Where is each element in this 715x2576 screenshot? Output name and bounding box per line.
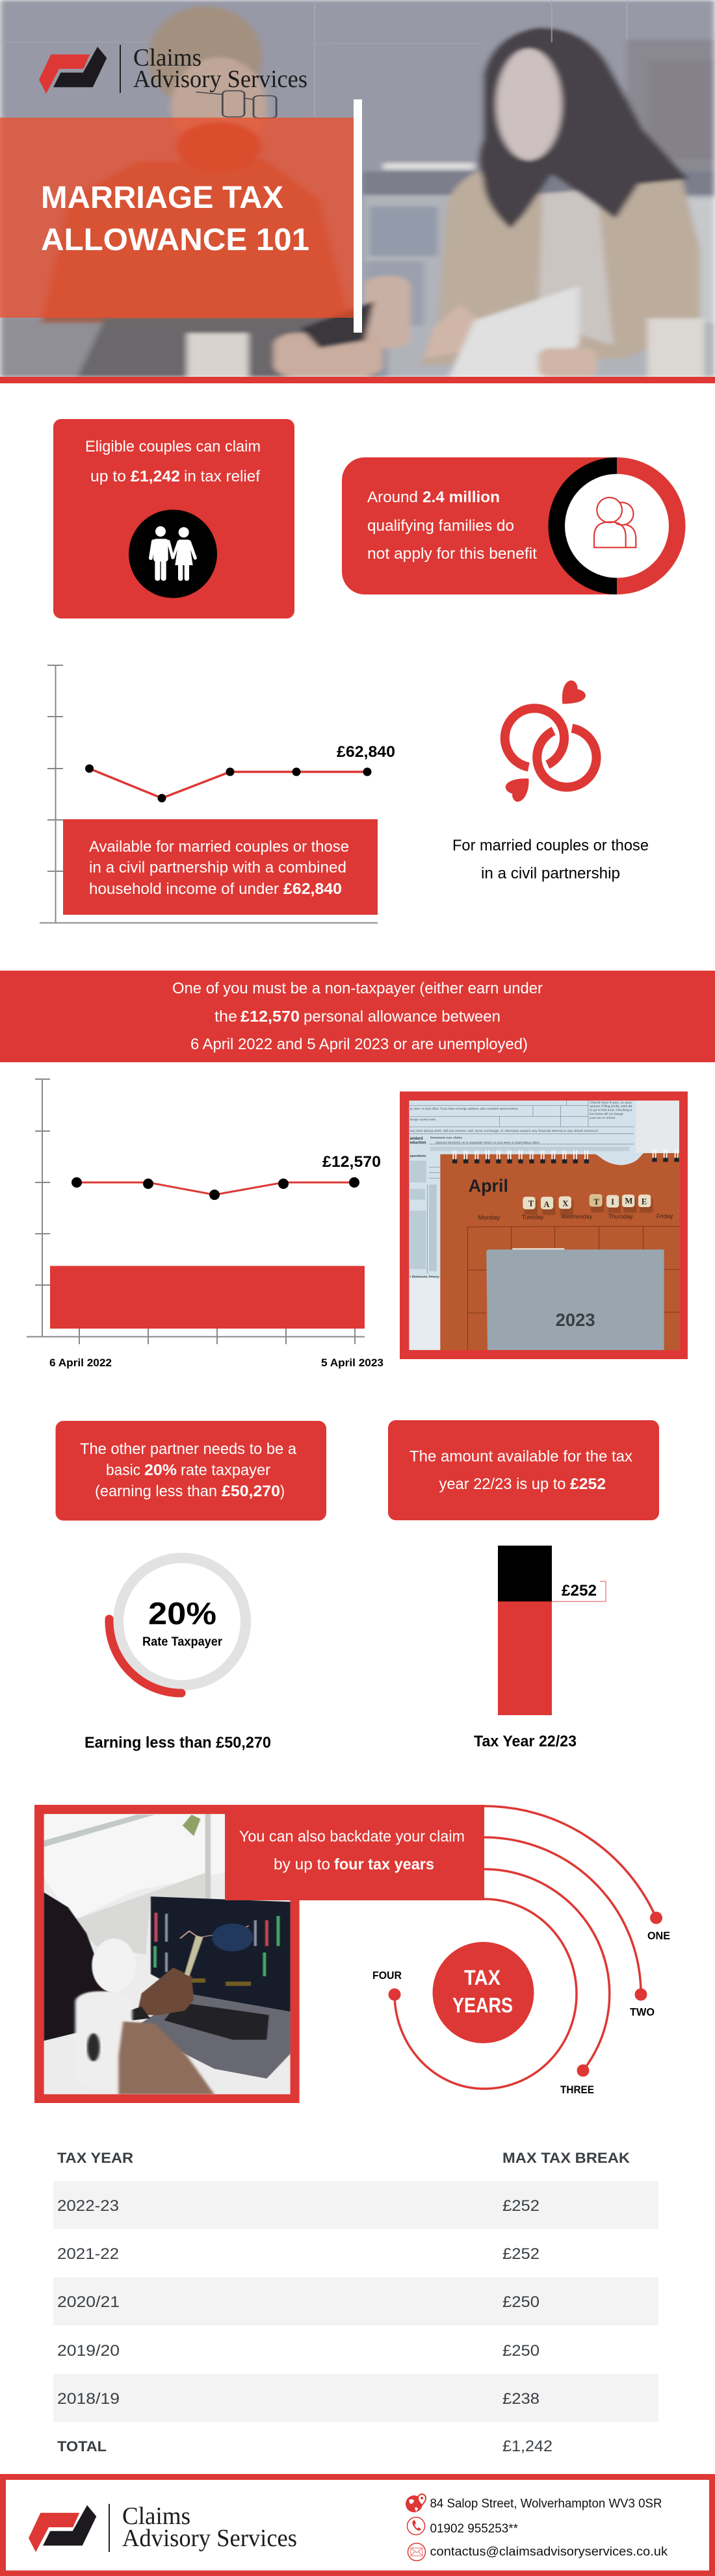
photo: person reviewing charts on laptop (34, 1805, 484, 2103)
photo: April tax time calendar: box below will not change (590, 1112, 624, 1116)
table rows: £252 (502, 2245, 540, 2263)
panel text: qualifying families do (367, 517, 514, 535)
photo: April tax time calendar: Friday (656, 1213, 673, 1219)
arc labels: THREE (560, 2084, 594, 2096)
photo: April tax time calendar: T (528, 1199, 534, 1208)
banner: non-taxpayer requirement: £12,570 (240, 1008, 300, 1025)
table rows: £1,242 (502, 2438, 552, 2455)
text: for married couples: For married couples or those (452, 837, 649, 854)
panel: other partner basic rate: 20% (144, 1462, 177, 1479)
panel text: £1,242 (131, 468, 180, 485)
icon: globe with pin (406, 2494, 426, 2512)
banner: non-taxpayer requirement: personal allowance between (304, 1008, 500, 1025)
table rows: 2020/21 (57, 2293, 120, 2311)
arc labels: ONE (647, 1930, 670, 1942)
panel text (367, 489, 537, 563)
label: tax year: Tax Year 22/23 (474, 1733, 577, 1750)
icon: couple holding hands (129, 509, 217, 598)
photo: April tax time calendar: X (562, 1199, 568, 1208)
photo: April tax time calendar: M (625, 1197, 632, 1206)
panel: amount available: The amount available for the tax (410, 1447, 632, 1466)
value label: £12,570 (322, 1153, 381, 1171)
arc labels: TWO (630, 2006, 655, 2018)
centre circle: tax years (433, 1942, 534, 2043)
photo: April tax time calendar: any time during 2020, did you receive, sell, send, exchange, or otherwise acquire any financial interest in any virtual currency? (410, 1129, 599, 1132)
photo: April tax time calendar: spouse if filing jointly, want $3 (590, 1104, 632, 1108)
white vertical bar (354, 99, 362, 333)
photo: April tax time calendar: r Disclosure, Privacy (410, 1275, 439, 1279)
photo: April tax time calendar: Monday (478, 1214, 500, 1221)
panel: other partner basic rate: basic (106, 1462, 140, 1479)
panel text: 2.4 million (422, 489, 500, 506)
panel: eligible couples claim (53, 419, 294, 618)
banner: non-taxpayer requirement: 6 April 2022 and 5 April 2023 or are unemployed) (190, 1036, 528, 1053)
contact: email: contactus@claimsadvisoryservices.co.uk (430, 2545, 668, 2558)
title (41, 181, 309, 257)
footer logo (29, 2503, 297, 2552)
logo: Claims Advisory Services: Advisory Services (133, 66, 307, 93)
chart: tax year stacked bar: £252 (562, 1582, 597, 1600)
logo: Claims Advisory Services (39, 44, 307, 94)
logo: Claims Advisory Services: Claims (133, 44, 202, 71)
photo: April tax time calendar: Spouse itemizes on a separate return or you were a dual-status alien (436, 1141, 540, 1144)
chart: combined income line chart (40, 665, 395, 923)
panel: amount available: £252 (570, 1475, 606, 1493)
panel text: not apply for this benefit (367, 545, 537, 563)
diagram: four tax years orbit arcs (372, 1806, 670, 2096)
table rows: 2018/19 (57, 2390, 120, 2408)
photo: April tax time calendar: Wednesday (561, 1214, 593, 1220)
panel: other partner basic rate: £50,270 (222, 1483, 280, 1500)
callout: combined household income (63, 819, 378, 915)
table rows: £250 (502, 2293, 540, 2311)
ring with people icon (549, 457, 685, 594)
chart: 20% rate taxpayer donut: 20% (148, 1597, 216, 1631)
footer logo: Advisory Services (122, 2525, 297, 2552)
callout: combined household income: £62,840 (283, 880, 342, 898)
photo: April tax time calendar: foreign country name (410, 1118, 436, 1121)
photo: April tax time calendar: Thursday (608, 1213, 633, 1219)
date labels: 5 April 2023 (321, 1357, 384, 1369)
red text box (225, 1805, 484, 1900)
table rows: £250 (502, 2342, 540, 2360)
banner: non-taxpayer requirement: the (214, 1008, 237, 1025)
translucent red title panel (0, 118, 354, 318)
panel text: in tax relief (184, 468, 260, 485)
panel text: up to (90, 468, 126, 485)
table header (57, 2150, 630, 2166)
panel: other partner basic rate: ) (280, 1483, 285, 1500)
chart: 20% rate taxpayer donut (109, 1558, 246, 1693)
date labels: 6 April 2022 (49, 1357, 112, 1369)
table header: MAX TAX BREAK (502, 2150, 630, 2166)
panel: 2.4 million families (342, 457, 685, 594)
chart: personal allowance line chart (27, 1079, 384, 1369)
panel: other partner basic rate: (earning less than (95, 1483, 217, 1500)
photo: April tax time calendar: your tax or refund. (590, 1116, 616, 1119)
table: maximum tax break by year (53, 2150, 658, 2455)
photo: April tax time calendar: A (543, 1200, 550, 1209)
title: ALLOWANCE 101 (41, 223, 309, 257)
centre circle: tax years: YEARS (452, 1993, 513, 2017)
table rows: 2022-23 (57, 2197, 119, 2215)
text: for married couples (452, 837, 649, 882)
photo: April tax time calendar: T (593, 1197, 599, 1206)
arc labels (372, 1930, 670, 2096)
label: earning less than: Earning less than £50,270 (84, 1734, 271, 1752)
contact: phone: 01902 955253** (430, 2522, 519, 2536)
photo: April tax time calendar: 2023 (556, 1310, 595, 1330)
table rows: TOTAL (57, 2438, 107, 2455)
chart: 20% rate taxpayer donut: Rate Taxpayer (142, 1635, 223, 1649)
title: MARRIAGE TAX (41, 181, 283, 215)
banner: non-taxpayer requirement (0, 971, 715, 1062)
hero bottom red band (0, 377, 715, 383)
photo: April tax time calendar: to go to this fund. Checking a (590, 1108, 632, 1112)
table rows: 2019/20 (57, 2342, 120, 2360)
callout: combined household income: household income of under (89, 880, 279, 898)
photo: April tax time calendar: eduction (410, 1141, 426, 1145)
photo: April tax time calendar: E (642, 1197, 647, 1206)
panel text: Eligible couples can claim (85, 438, 261, 455)
arc labels: FOUR (372, 1969, 402, 1982)
table rows (57, 2197, 552, 2455)
photo: April tax time calendar: ependents (410, 1154, 426, 1158)
red text box: You can also backdate your claim (239, 1828, 465, 1846)
icon: interlinked wedding rings with hearts (505, 680, 597, 802)
red text box: by up to (274, 1856, 330, 1874)
red bar (50, 1266, 365, 1329)
table rows: 2021-22 (57, 2245, 119, 2263)
banner: non-taxpayer requirement: One of you must be a non-taxpayer (either earn under (172, 980, 543, 997)
hero photo: couple reviewing paperwork (0, 0, 715, 377)
icon: phone (407, 2517, 425, 2535)
red text box: four tax years (334, 1856, 434, 1874)
photo: April tax time calendar: Tuesday (522, 1214, 544, 1220)
chart: tax year stacked bar (498, 1546, 606, 1715)
hero header (0, 0, 715, 383)
icon: envelope (408, 2543, 425, 2561)
photo: April tax time calendar: April (469, 1175, 508, 1195)
date labels (49, 1357, 384, 1369)
callout: combined household income: Available for married couples or those (89, 838, 349, 856)
panel: amount available: year 22/23 is up to (439, 1475, 566, 1493)
value label: £62,840 (337, 743, 395, 761)
table rows: £252 (502, 2197, 540, 2215)
table rows: £238 (502, 2390, 540, 2408)
photo: April tax time calendar (400, 1091, 688, 1359)
panel text (85, 438, 261, 485)
panel: other partner basic rate: The other partner needs to be a (80, 1440, 297, 1458)
callout: combined household income: in a civil partnership with a combined (89, 859, 346, 876)
centre circle: tax years: TAX (464, 1966, 501, 1989)
footer logo: Claims (122, 2503, 190, 2530)
panel text: Around (367, 489, 418, 506)
panel: other partner basic rate (56, 1421, 326, 1520)
photo: April tax time calendar: I (611, 1197, 614, 1206)
photo: April tax time calendar: andard (410, 1137, 423, 1141)
contact: address: 84 Salop Street, Wolverhampton WV3 0SR (430, 2497, 662, 2510)
panel: amount available (388, 1420, 659, 1520)
panel: other partner basic rate: rate taxpayer (181, 1462, 270, 1479)
photo: April tax time calendar: Someone can claim: (430, 1136, 463, 1140)
table header: TAX YEAR (57, 2150, 133, 2166)
footer (3, 2477, 712, 2573)
text: for married couples: in a civil partnership (481, 865, 620, 882)
photo: April tax time calendar: Check here if you, or your (590, 1101, 632, 1104)
photo: April tax time calendar: ty, town, or post office. If you have a foreign address, also complete spaces below. (410, 1107, 518, 1110)
